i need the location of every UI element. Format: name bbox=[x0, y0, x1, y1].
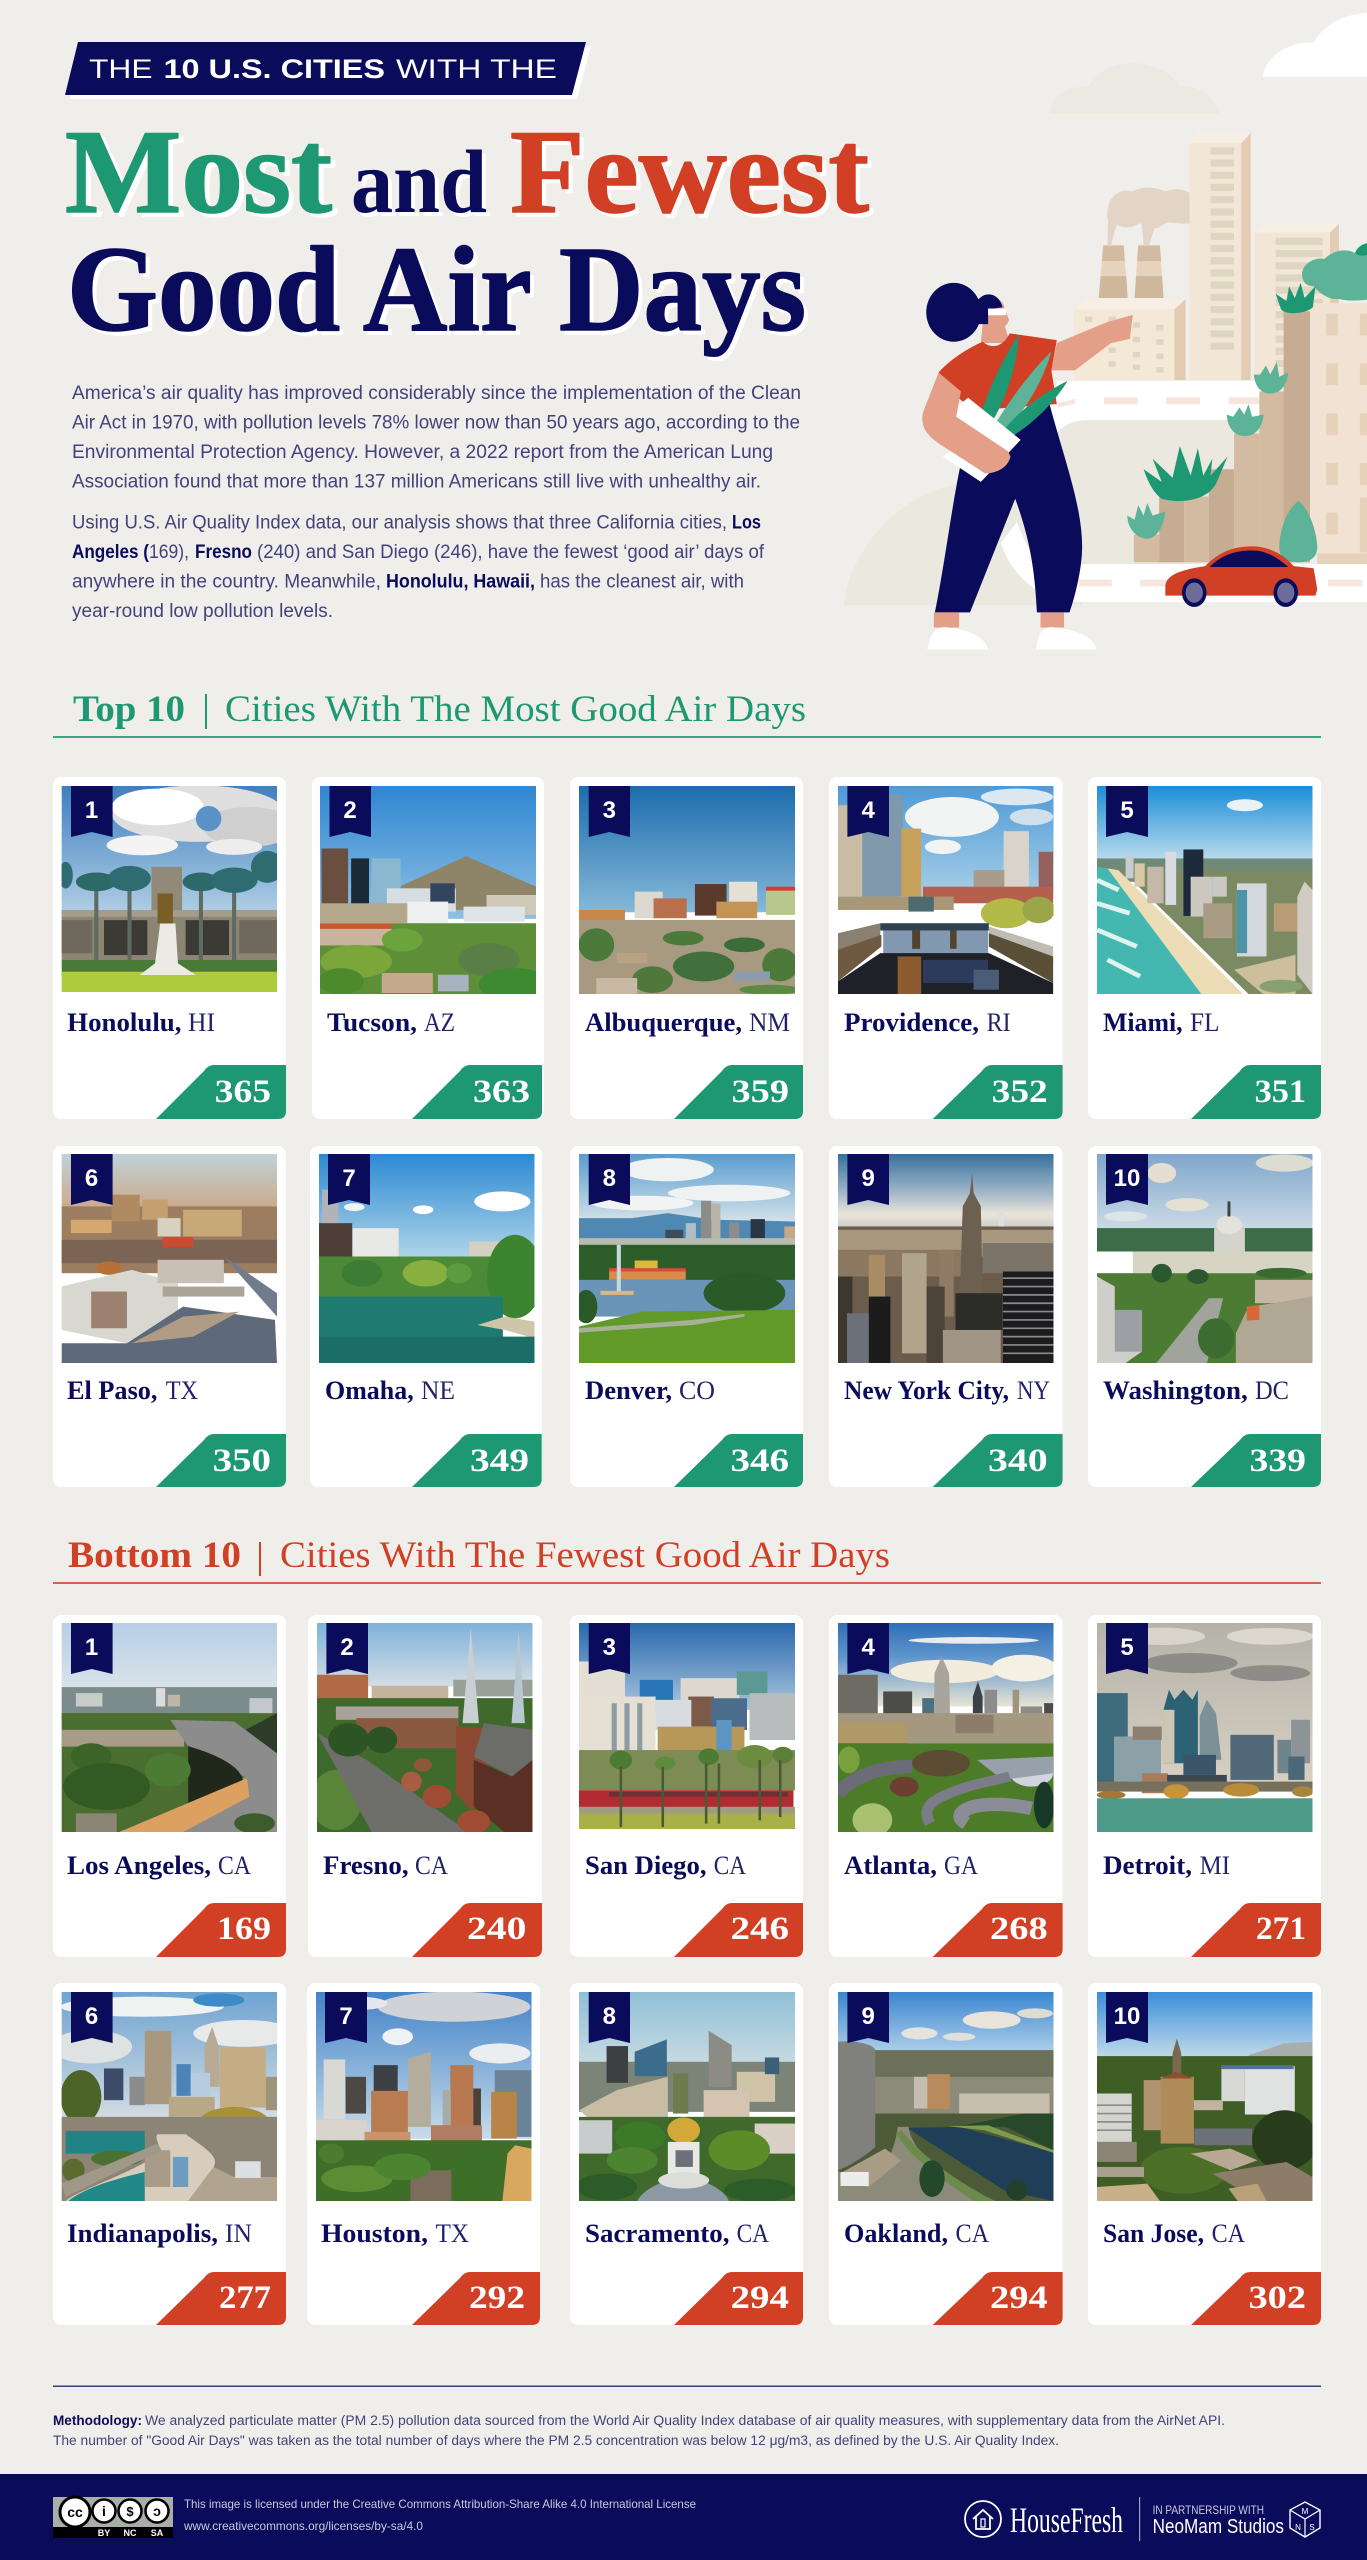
card: Honolulu bbox=[53, 777, 295, 1119]
illustration: city scene with woman, plants and car bbox=[843, 13, 1367, 649]
rank badge bbox=[589, 1154, 630, 1205]
rank badge: 2 bbox=[340, 1634, 354, 1661]
rank badge bbox=[1106, 786, 1148, 837]
value tag: 359 bbox=[732, 1074, 789, 1110]
value tag: 294 bbox=[730, 2280, 789, 2316]
city name: FL bbox=[1190, 1007, 1220, 1037]
city name: CA bbox=[714, 1850, 746, 1880]
rank badge bbox=[325, 1992, 367, 2043]
card: Providence bbox=[829, 777, 1063, 1119]
photo: Atlanta bbox=[838, 1623, 1054, 1832]
city name bbox=[67, 1375, 198, 1405]
value tag bbox=[412, 2272, 540, 2325]
title banner: THE bbox=[89, 54, 152, 84]
value tag bbox=[1191, 1065, 1321, 1119]
value tag bbox=[933, 2272, 1063, 2325]
city name: Houston, bbox=[321, 2218, 428, 2248]
rank badge bbox=[847, 786, 889, 837]
icon: tree canopy bbox=[1302, 243, 1367, 301]
photo: Sacramento bbox=[579, 1992, 795, 2201]
card: Albuquerque bbox=[570, 777, 803, 1119]
partnership divider bbox=[1139, 2497, 1140, 2541]
heading: bottom 10 bbox=[53, 1535, 1321, 1584]
city name: NM bbox=[749, 1007, 790, 1037]
methodology text: We analyzed particulate matter (PM 2.5) pollution data sourced from the World Air Quality Index database of air quality measures, with supplementary data from the AirNet API. bbox=[145, 2413, 1225, 2428]
city name: Sacramento, bbox=[585, 2218, 730, 2248]
icon: creative commons badge: i bbox=[102, 2503, 106, 2519]
city name: Oakland, bbox=[844, 2218, 948, 2248]
city name: Tucson, bbox=[327, 1007, 417, 1037]
intro paragraph 2: Los bbox=[732, 513, 761, 534]
intro paragraph 2: Honolulu, Hawaii, bbox=[386, 572, 535, 592]
logo: NeoMam Studios: NeoMam Studios bbox=[1153, 2516, 1284, 2538]
rank badge: 10 bbox=[1114, 2003, 1140, 2030]
value tag bbox=[1191, 1434, 1321, 1487]
city name: CA bbox=[737, 2218, 769, 2248]
main title bbox=[65, 105, 873, 361]
city name: Atlanta, bbox=[844, 1850, 937, 1880]
background hill bbox=[843, 420, 1263, 605]
intro paragraph 2: anywhere in the country. Meanwhile, bbox=[72, 572, 381, 592]
value tag: 351 bbox=[1255, 1074, 1306, 1110]
city name: Indianapolis, bbox=[67, 2218, 218, 2248]
icon: woman holding plant bbox=[922, 283, 1133, 649]
value tag: 349 bbox=[470, 1443, 529, 1479]
rank badge bbox=[71, 1623, 113, 1674]
city name: El Paso, bbox=[67, 1375, 158, 1405]
city name: CA bbox=[956, 2218, 989, 2248]
card: San Jose bbox=[1088, 1983, 1321, 2325]
value tag: 277 bbox=[219, 2280, 271, 2316]
card: Omaha bbox=[310, 1146, 543, 1487]
main title: Fewest bbox=[514, 109, 873, 242]
value tag bbox=[412, 1434, 542, 1487]
main title: Most bbox=[70, 109, 337, 242]
value tag bbox=[412, 1903, 542, 1957]
city name: DC bbox=[1255, 1375, 1289, 1405]
card: San Diego bbox=[570, 1615, 803, 1957]
rank badge bbox=[71, 1992, 113, 2043]
rank badge bbox=[71, 786, 113, 837]
city name bbox=[321, 2218, 469, 2248]
rank badge bbox=[589, 1992, 630, 2043]
plant columns bbox=[1134, 311, 1310, 562]
city name: CA bbox=[415, 1850, 448, 1880]
rank badge bbox=[71, 1154, 113, 1205]
photo: Indianapolis bbox=[62, 1992, 277, 2201]
rank badge: 3 bbox=[603, 1634, 616, 1661]
rank badge: 1 bbox=[85, 1634, 98, 1661]
methodology text: Methodology: bbox=[53, 2413, 142, 2428]
photo: Tucson bbox=[320, 786, 536, 994]
intro paragraph 2: year-round low pollution levels. bbox=[72, 601, 333, 622]
photo: San Jose bbox=[1097, 1992, 1312, 2201]
city name: HI bbox=[188, 1007, 215, 1037]
intro paragraph 2: Angeles ( bbox=[72, 542, 150, 563]
value tag: 346 bbox=[730, 1443, 789, 1479]
intro paragraph 2: Using U.S. Air Quality Index data, our analysis shows that three California cities, bbox=[72, 513, 727, 534]
logo: NeoMam Studios: S bbox=[1309, 2523, 1315, 2532]
rank badge: 9 bbox=[862, 1165, 875, 1192]
photo: Omaha bbox=[319, 1154, 534, 1363]
city name bbox=[325, 1375, 455, 1405]
value tag: 340 bbox=[988, 1443, 1048, 1479]
value tag: 246 bbox=[730, 1911, 789, 1947]
card: New York City bbox=[829, 1146, 1063, 1487]
main title: Good Air Days bbox=[71, 226, 810, 361]
icon: plants bbox=[1127, 283, 1317, 562]
rank badge bbox=[847, 1992, 889, 2043]
main title: Most bbox=[65, 105, 332, 238]
city name: Providence, bbox=[844, 1007, 979, 1037]
icon: creative commons badge: BY bbox=[98, 2528, 110, 2538]
value tag bbox=[674, 2272, 803, 2325]
city name: Washington, bbox=[1103, 1375, 1248, 1405]
intro paragraph 2: Fresno bbox=[195, 542, 252, 563]
value tag bbox=[933, 1065, 1063, 1119]
icon: creative commons badge: ↄ bbox=[153, 2503, 161, 2519]
big building right bbox=[1310, 303, 1367, 564]
rank badge: 7 bbox=[339, 2003, 353, 2030]
logo: NeoMam Studios: M bbox=[1302, 2507, 1309, 2516]
city name: RI bbox=[987, 1007, 1011, 1037]
rank badge: 8 bbox=[603, 2003, 616, 2030]
value tag bbox=[412, 1065, 542, 1119]
photo: Providence bbox=[838, 786, 1054, 994]
value tag bbox=[933, 1434, 1063, 1487]
photo: Detroit bbox=[1097, 1623, 1312, 1832]
photo: Honolulu bbox=[62, 786, 277, 992]
rank badge: 4 bbox=[862, 1634, 876, 1661]
icon: creative commons badge: $ bbox=[126, 2504, 134, 2519]
icon: second tower bbox=[1254, 224, 1339, 380]
card: Houston bbox=[307, 1983, 540, 2325]
main title: Fewest bbox=[510, 105, 869, 238]
main title: and bbox=[355, 137, 491, 236]
methodology text bbox=[53, 2413, 1225, 2448]
photo: El Paso bbox=[62, 1154, 277, 1363]
card: Oakland bbox=[829, 1983, 1063, 2325]
photo: Albuquerque bbox=[579, 786, 795, 994]
photo: Houston bbox=[316, 1992, 532, 2201]
license text: www.creativecommons.org/licenses/by-sa/4.0 bbox=[183, 2519, 423, 2533]
city name: Honolulu, bbox=[67, 1007, 182, 1037]
icon: creative commons badge: cc bbox=[67, 2504, 83, 2520]
value tag bbox=[1191, 2272, 1321, 2325]
rank badge: 5 bbox=[1120, 797, 1134, 824]
intro paragraph 2: (240) and San Diego (246), have the fewest ‘good air’ days of bbox=[257, 542, 765, 563]
value tag: 302 bbox=[1248, 2280, 1306, 2316]
heading: bottom 10: Bottom 10 bbox=[68, 1535, 241, 1576]
rank badge bbox=[328, 1154, 370, 1205]
value tag: 363 bbox=[473, 1074, 530, 1110]
rank badge: 6 bbox=[85, 1165, 98, 1192]
logo: NeoMam Studios: N bbox=[1295, 2523, 1301, 2532]
city name: San Jose, bbox=[1103, 2218, 1204, 2248]
city name: New York City, bbox=[844, 1375, 1009, 1405]
icon: clouds bbox=[1050, 13, 1367, 114]
rank badge bbox=[1106, 1992, 1148, 2043]
value tag bbox=[1191, 1903, 1321, 1957]
city name: Los Angeles, bbox=[67, 1850, 211, 1880]
intro paragraph 1 bbox=[72, 383, 801, 492]
city name: Denver, bbox=[585, 1375, 672, 1405]
value tag: 352 bbox=[992, 1074, 1048, 1110]
card: Atlanta bbox=[829, 1615, 1063, 1957]
rank badge: 10 bbox=[1114, 1165, 1140, 1192]
photo: San Diego bbox=[579, 1623, 795, 1829]
main title: and bbox=[351, 133, 487, 232]
value tag: 294 bbox=[990, 2280, 1048, 2316]
city name: Albuquerque, bbox=[585, 1007, 742, 1037]
logo: HouseFresh: HouseFresh bbox=[1010, 2500, 1123, 2540]
heading: top 10: Cities With The Most Good Air Days bbox=[225, 689, 806, 730]
heading: bottom 10: Cities With The Fewest Good Air Days bbox=[280, 1535, 890, 1576]
value tag bbox=[156, 1434, 286, 1487]
intro paragraph 2: has the cleanest air, with bbox=[540, 572, 744, 592]
card: Fresno bbox=[308, 1615, 542, 1957]
license text bbox=[183, 2497, 696, 2533]
rank badge: 6 bbox=[85, 2003, 98, 2030]
card: Denver bbox=[570, 1146, 803, 1487]
photo: Washington bbox=[1097, 1154, 1312, 1363]
value tag bbox=[674, 1065, 803, 1119]
intro paragraph 2 bbox=[72, 513, 765, 622]
card: Detroit bbox=[1088, 1615, 1321, 1957]
photo: Miami bbox=[1097, 786, 1312, 994]
photo: Oakland bbox=[838, 1992, 1054, 2201]
city name bbox=[1103, 1850, 1230, 1880]
intro paragraph 1: Environmental Protection Agency. However, a 2022 report from the American Lung bbox=[72, 442, 773, 463]
rank badge bbox=[1106, 1623, 1148, 1674]
title banner: 10 U.S. CITIES bbox=[164, 54, 385, 84]
rank badge: 4 bbox=[862, 797, 876, 824]
card: El Paso bbox=[53, 1146, 286, 1487]
value tag bbox=[674, 1434, 803, 1487]
city name: NE bbox=[421, 1375, 455, 1405]
rank badge bbox=[847, 1154, 889, 1205]
logo: NeoMam Studios bbox=[1153, 2502, 1320, 2538]
value tag: 169 bbox=[217, 1911, 271, 1947]
intro paragraph 1: Air Act in 1970, with pollution levels 78% lower now than 50 years ago, according to the bbox=[72, 412, 800, 434]
value tag: 365 bbox=[215, 1074, 271, 1110]
value tag: 240 bbox=[467, 1911, 526, 1947]
methodology rule bbox=[53, 2386, 1321, 2387]
title banner: WITH THE bbox=[396, 54, 557, 84]
value tag: 350 bbox=[213, 1443, 271, 1479]
rank badge bbox=[847, 1623, 889, 1674]
heading: top 10: Top 10 bbox=[73, 689, 185, 730]
rank badge bbox=[326, 1623, 368, 1674]
card: Miami bbox=[1088, 777, 1321, 1119]
rank badge bbox=[589, 1623, 630, 1674]
rank badge: 8 bbox=[603, 1165, 616, 1192]
rank badge: 1 bbox=[85, 797, 98, 824]
city name: IN bbox=[225, 2218, 252, 2248]
card: Indianapolis bbox=[50, 1983, 295, 2325]
photo: Fresno bbox=[317, 1623, 532, 1832]
intro paragraph 1: Association found that more than 137 million Americans still live with unhealthy air. bbox=[72, 472, 761, 492]
footer band bbox=[0, 2474, 1367, 2560]
city name: CO bbox=[679, 1375, 715, 1405]
heading: top 10 bbox=[53, 689, 1321, 738]
photo: Denver bbox=[579, 1154, 795, 1363]
logo: HouseFresh bbox=[965, 2500, 1123, 2540]
rank badge: 2 bbox=[343, 797, 357, 824]
icon: tall tower bbox=[1190, 133, 1251, 380]
logo: NeoMam Studios: IN PARTNERSHIP WITH bbox=[1153, 2503, 1264, 2517]
upper road bbox=[1050, 381, 1263, 438]
methodology text: The number of "Good Air Days" was taken as the total number of days where the PM 2.5 concentration was below 12 μg/m3, as defined by the U.S. Air Quality Index. bbox=[53, 2433, 1059, 2448]
card: Los Angeles bbox=[53, 1615, 286, 1957]
photo: New York City bbox=[838, 1154, 1054, 1363]
city name: San Diego, bbox=[585, 1850, 706, 1880]
value tag: 268 bbox=[990, 1911, 1048, 1947]
city name: TX bbox=[436, 2218, 469, 2248]
value tag bbox=[156, 1065, 286, 1119]
city name bbox=[327, 1007, 455, 1037]
license text: This image is licensed under the Creative Commons Attribution-Share Alike 4.0 International License bbox=[184, 2497, 696, 2511]
value tag: 292 bbox=[469, 2280, 525, 2316]
city name: CA bbox=[218, 1850, 251, 1880]
rank badge bbox=[1106, 1154, 1148, 1205]
value tag bbox=[156, 2272, 286, 2325]
icon: creative commons badge: SA bbox=[151, 2528, 164, 2538]
title banner bbox=[65, 42, 591, 99]
rank badge: 9 bbox=[862, 2003, 875, 2030]
rank badge bbox=[330, 786, 371, 837]
city name: Fresno, bbox=[323, 1850, 409, 1880]
icon: red car bbox=[1165, 546, 1317, 607]
city name bbox=[585, 1375, 715, 1405]
city name: Detroit, bbox=[1103, 1850, 1192, 1880]
intro paragraph 1: America’s air quality has improved considerably since the implementation of the Clean bbox=[72, 383, 801, 404]
value tag bbox=[674, 1903, 803, 1957]
rank badge: 5 bbox=[1120, 1634, 1134, 1661]
city name bbox=[323, 1850, 448, 1880]
card: Tucson bbox=[312, 777, 550, 1119]
city name: CA bbox=[1212, 2218, 1245, 2248]
city name: Miami, bbox=[1103, 1007, 1183, 1037]
city name: AZ bbox=[424, 1007, 455, 1037]
rank badge bbox=[589, 786, 630, 837]
card: Sacramento bbox=[570, 1983, 803, 2325]
city name: NY bbox=[1017, 1375, 1050, 1405]
city name: TX bbox=[166, 1375, 198, 1405]
rank badge: 7 bbox=[342, 1165, 356, 1192]
value tag bbox=[933, 1903, 1063, 1957]
icon: creative commons badge bbox=[53, 2497, 173, 2538]
intro paragraph 2: 169), bbox=[149, 542, 189, 563]
city name: GA bbox=[944, 1850, 978, 1880]
value tag: 339 bbox=[1250, 1443, 1306, 1479]
icon: factory with smoke bbox=[1074, 188, 1191, 380]
photo: Los Angeles bbox=[62, 1623, 277, 1832]
card: Washington bbox=[1088, 1146, 1321, 1487]
main title: Good Air Days bbox=[67, 222, 806, 357]
city name: MI bbox=[1200, 1850, 1230, 1880]
rank badge: 3 bbox=[603, 797, 616, 824]
icon: creative commons badge: NC bbox=[124, 2528, 137, 2538]
value tag bbox=[156, 1903, 286, 1957]
city name bbox=[844, 1850, 978, 1880]
city name: Omaha, bbox=[325, 1375, 414, 1405]
value tag: 271 bbox=[1256, 1911, 1306, 1947]
lower road bbox=[1001, 522, 1367, 602]
